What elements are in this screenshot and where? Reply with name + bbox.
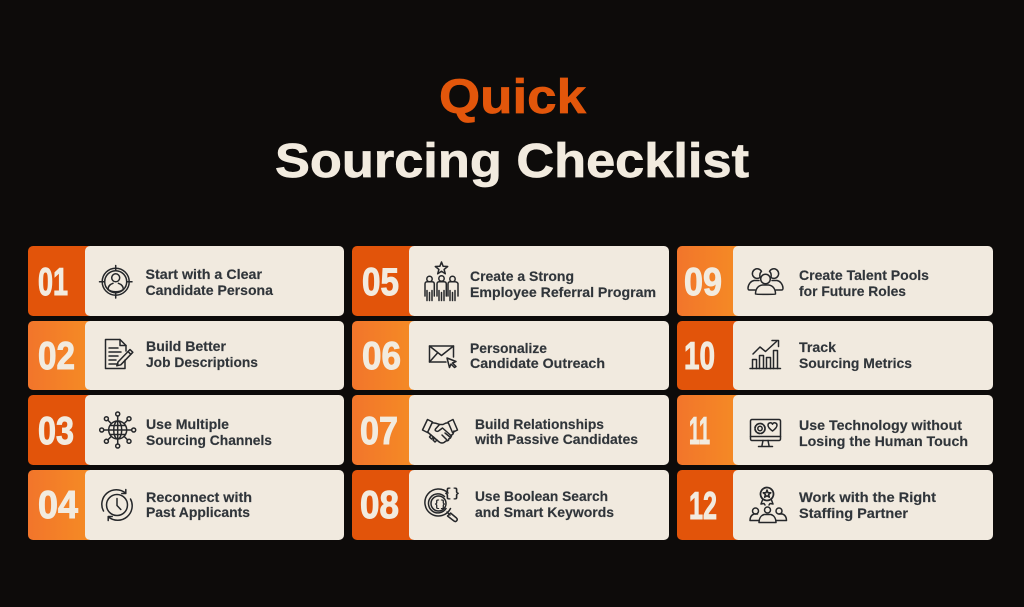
icon: growth bar chart [750,340,780,368]
card 09: Create Talent Pools [799,267,929,283]
card 05: Create a Strong [470,268,574,284]
card 06: 06 [362,335,401,378]
card 03: Use Multiple [146,416,229,432]
card 04: Reconnect with [146,489,252,505]
card 02: Build Better [146,338,227,354]
card 05: Employee Referral Program [470,284,656,300]
card 02 [28,321,344,390]
card 01: Candidate Persona [146,282,273,298]
card 11: 11 [689,410,710,453]
card 05: 05 [362,261,399,304]
card 04: 04 [38,484,79,527]
icon: star over three people [425,262,458,300]
icon: clock with arrows [102,490,132,520]
card 12: Staffing Partner [799,505,909,521]
card 07: Build Relationships [475,416,604,432]
card 07 [352,395,669,465]
title: Sourcing Checklist [275,135,749,188]
card 08 [352,470,669,540]
card 02: Job Descriptions [146,354,258,370]
card 03 [28,395,344,465]
card 09: 09 [684,261,722,304]
card 09 [677,246,993,316]
title: Quick [439,71,586,124]
card 01: 01 [38,261,68,304]
card 12: 12 [689,485,717,528]
title [275,71,749,188]
card 01 [28,246,344,316]
card 10: 10 [684,335,715,378]
card 12: Work with the Right [799,489,936,505]
icon: magnifier with braces [425,487,460,522]
card 06: Candidate Outreach [470,355,605,371]
card 06: Personalize [470,340,547,356]
icon: network globe [100,412,136,448]
card 01: Start with a Clear [146,266,263,282]
icon: magnifier with braces: {} [444,487,460,501]
card 10 [677,321,993,390]
card 04: Past Applicants [146,504,250,520]
card 12 [677,470,993,540]
card 08: Use Boolean Search [475,488,608,504]
card 10: Track [799,339,836,355]
card 07: with Passive Candidates [474,431,638,447]
card 08: and Smart Keywords [475,504,614,520]
card 08: 08 [360,484,399,527]
icon: document with pen [106,340,133,368]
card 11 [677,395,993,465]
card 11: Losing the Human Touch [799,433,968,449]
card 07: 07 [360,410,398,453]
card 05 [352,246,669,316]
card 11: Use Technology without [799,417,962,433]
icon: medal over team [750,488,786,522]
card 10: Sourcing Metrics [799,355,912,371]
card 09: for Future Roles [799,283,906,299]
icon: envelope with cursor [430,346,456,368]
icon: monitor with gear and heart [750,420,780,446]
card 03: Sourcing Channels [146,432,272,448]
card 02: 02 [38,335,75,378]
card 04 [28,470,344,540]
icon: handshake [422,420,458,443]
icon: talent pool people [748,269,783,294]
card 03: 03 [38,410,74,453]
icon: target persona [100,266,132,298]
card 06 [352,321,669,390]
icon: magnifier with braces: {} [434,499,446,511]
